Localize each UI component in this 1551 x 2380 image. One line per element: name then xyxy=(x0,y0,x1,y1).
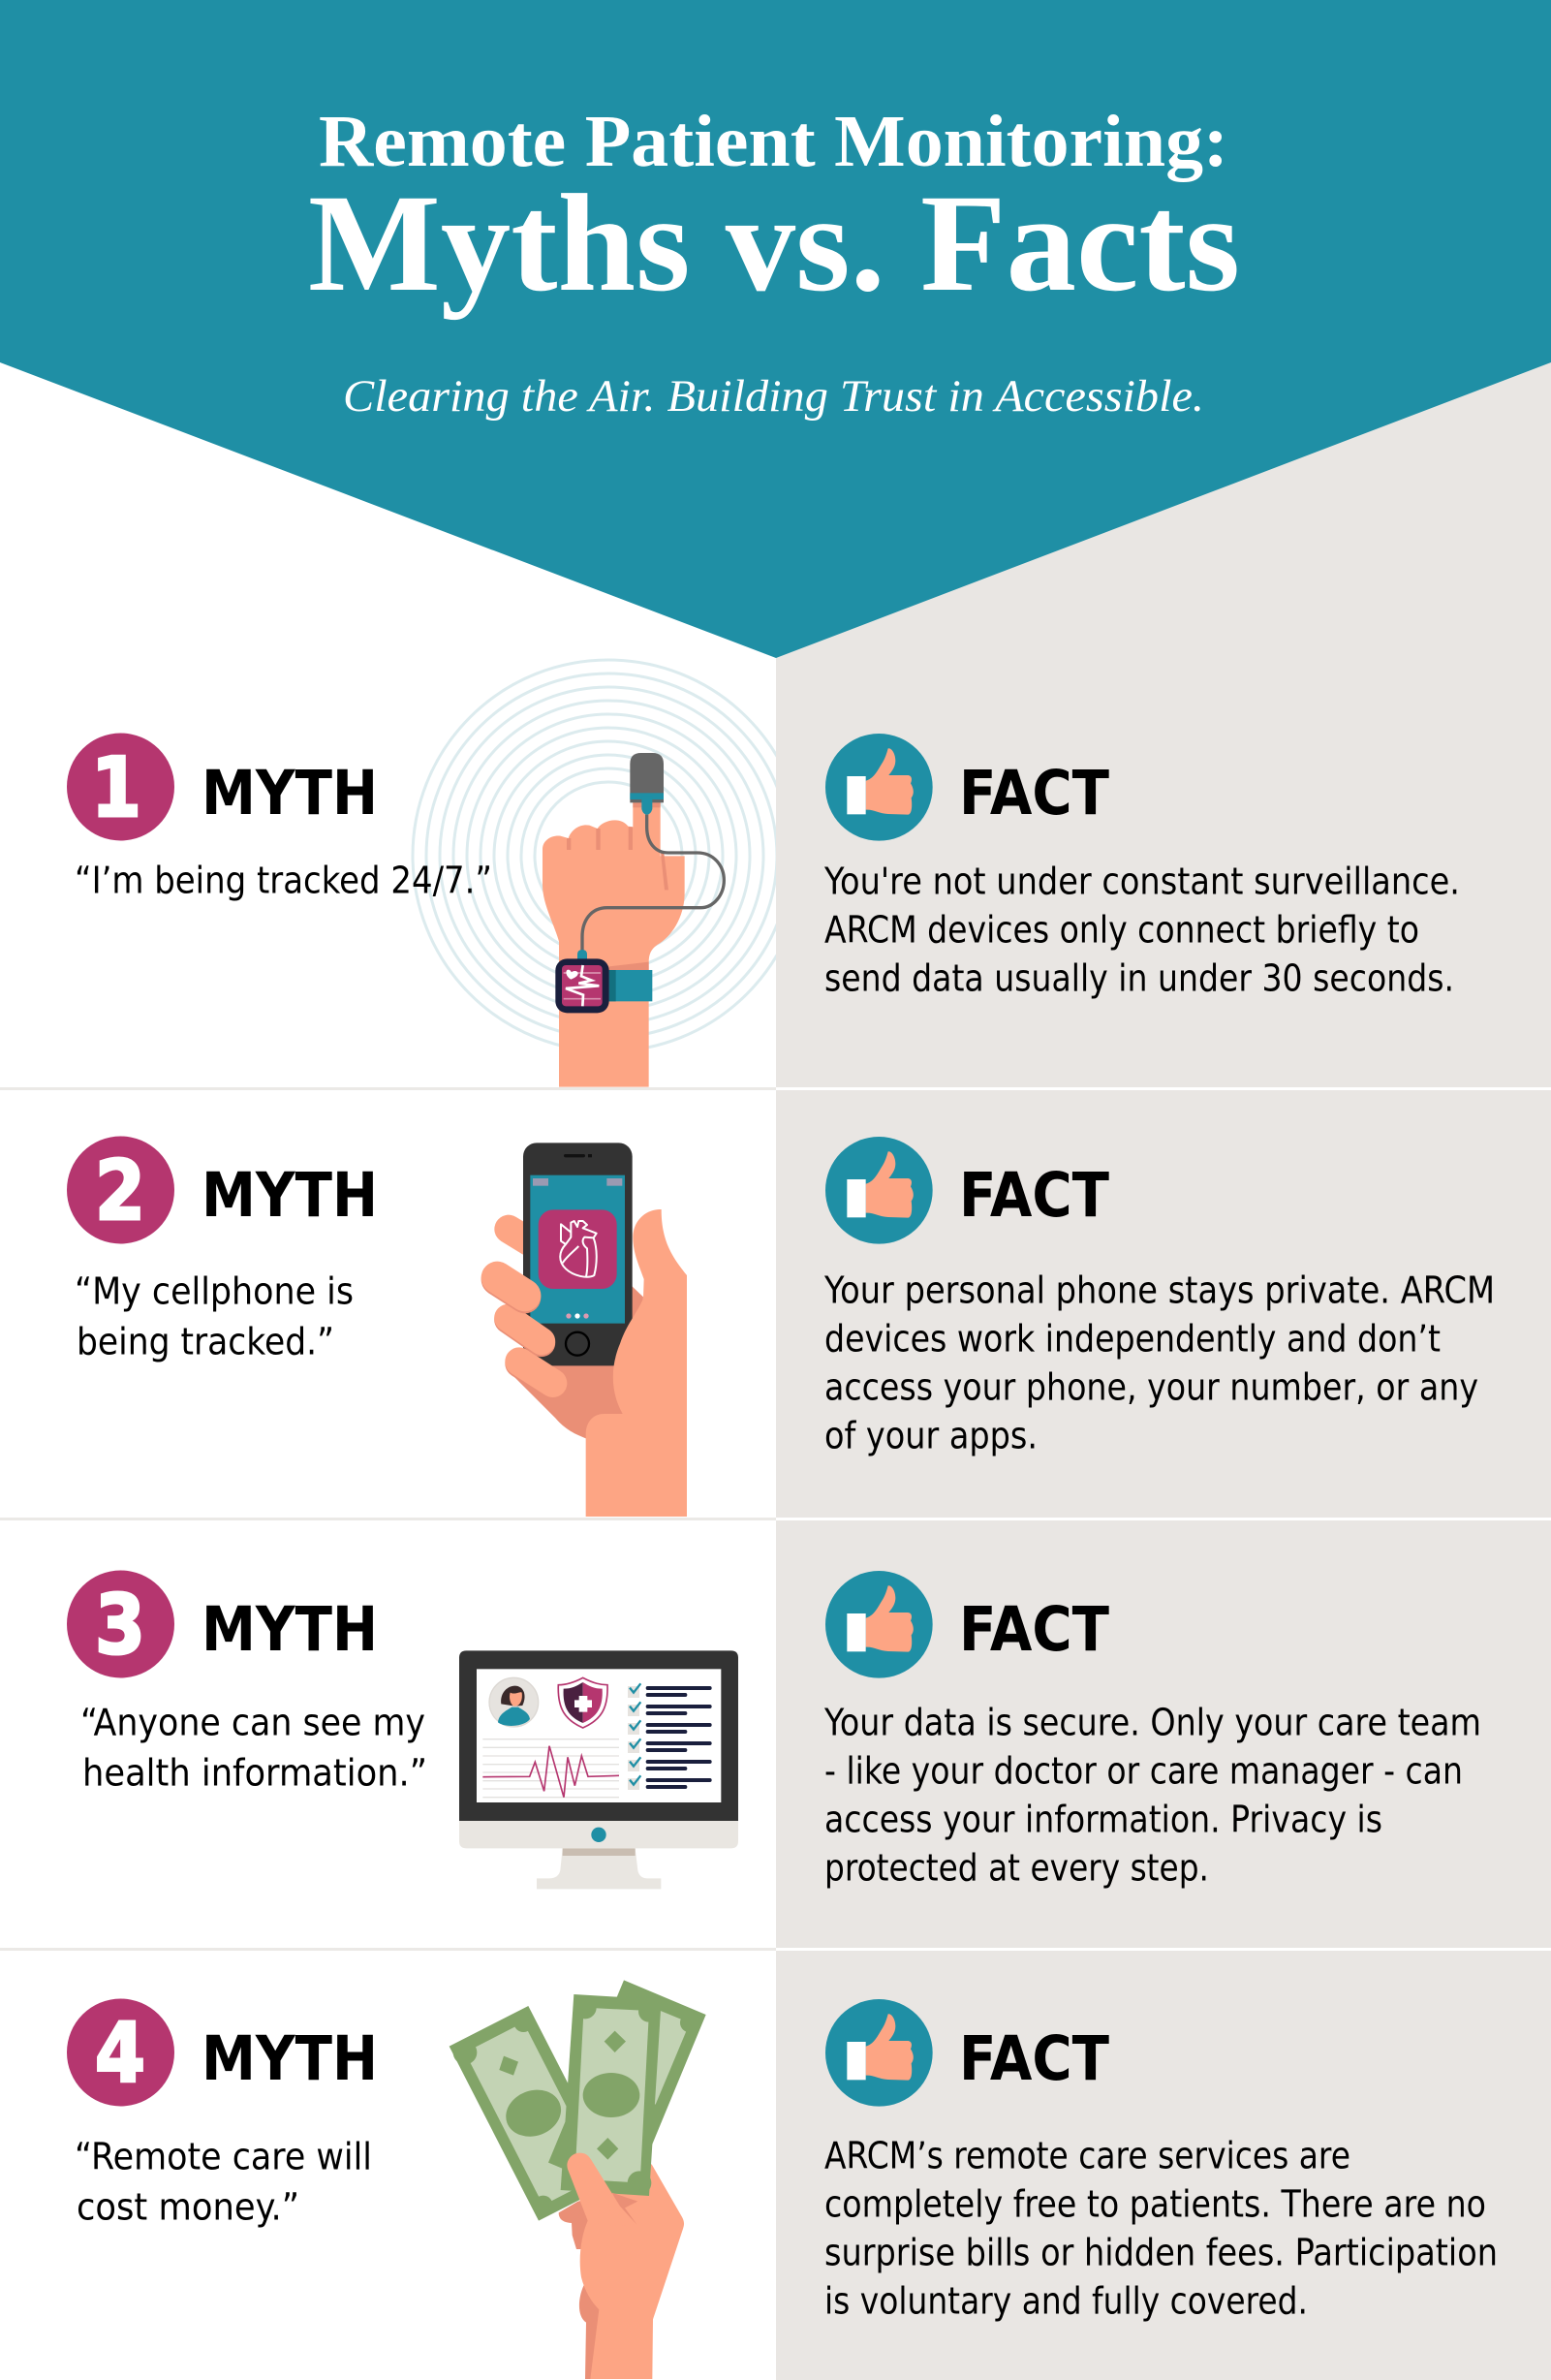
myth 1 heading: MYTH xyxy=(202,758,378,829)
fact 2 text: devices work independently and don’t xyxy=(824,1318,1441,1361)
myth 3 number badge xyxy=(67,1570,174,1678)
shield xyxy=(558,1677,607,1728)
header banner xyxy=(0,0,1551,658)
panel: fact 4 xyxy=(776,1951,1551,2380)
myth 4 quote: “Remote care will xyxy=(75,2136,372,2178)
fact 1 heading: FACT xyxy=(959,758,1109,829)
fact 3 text: access your information. Privacy is xyxy=(824,1799,1382,1841)
panel: myth 3 xyxy=(0,1520,776,1948)
checklist xyxy=(628,1683,710,1790)
fact 1 text xyxy=(823,861,1460,1000)
fact 4 thumbs-up icon xyxy=(825,1999,933,2107)
myth 3 heading: MYTH xyxy=(202,1594,378,1665)
fact 3 thumbs-up icon xyxy=(825,1571,933,1678)
title line one: Remote Patient Monitoring: xyxy=(319,101,1228,182)
fact 1 text: You're not under constant surveillance. xyxy=(823,861,1460,903)
panel: myth 2 xyxy=(0,1090,776,1518)
illustration: monitor with health record xyxy=(459,1650,738,1889)
myth 1 number badge xyxy=(67,733,174,841)
fact 1 text: send data usually in under 30 seconds. xyxy=(824,957,1454,1000)
fact 3 text: protected at every step. xyxy=(824,1847,1209,1890)
fact 2 text xyxy=(823,1269,1495,1457)
fact 1 text: ARCM devices only connect briefly to xyxy=(824,909,1419,952)
myth 1 quote: “I’m being tracked 24/7.” xyxy=(75,859,492,901)
fact 2 heading: FACT xyxy=(959,1160,1109,1231)
myth 1 number badge: 1 xyxy=(91,740,141,836)
subtitle: Clearing the Air. Building Trust in Accessible. xyxy=(343,371,1204,422)
illustration: hand holding cash xyxy=(450,1980,706,2379)
fact 3 text: - like your doctor or care manager - can xyxy=(824,1750,1463,1793)
fact 4 text: is voluntary and fully covered. xyxy=(824,2279,1308,2322)
fact 4 text xyxy=(824,2134,1498,2322)
panel: myth 4 xyxy=(0,1951,776,2380)
myth 4 number badge: 4 xyxy=(95,2006,145,2102)
myth 2 quote xyxy=(75,1269,354,1362)
myth 3 quote: health information.” xyxy=(82,1752,427,1795)
myth 4 quote xyxy=(75,2136,372,2229)
myth 2 quote: being tracked.” xyxy=(77,1320,334,1362)
fact 1 thumbs-up icon xyxy=(825,734,933,841)
myth 3 quote: “Anyone can see my xyxy=(80,1702,425,1744)
myth 2 quote: “My cellphone is xyxy=(75,1269,354,1312)
myth 2 heading: MYTH xyxy=(202,1160,378,1231)
fact 2 thumbs-up icon xyxy=(825,1137,933,1244)
fact 4 heading: FACT xyxy=(959,2023,1109,2094)
title line two: Myths vs. Facts xyxy=(308,167,1240,321)
myth 2 number badge: 2 xyxy=(95,1143,145,1239)
myth 4 number badge xyxy=(67,1998,174,2107)
myth 2 number badge xyxy=(67,1136,174,1244)
myth 3 quote xyxy=(80,1702,427,1795)
chart: ECG trace xyxy=(482,1739,619,1798)
fact 3 heading: FACT xyxy=(959,1594,1109,1665)
myth 3 number badge: 3 xyxy=(95,1578,145,1674)
fact 2 text: of your apps. xyxy=(824,1415,1038,1457)
illustration: concentric signal rings xyxy=(413,660,804,1051)
panel: myth 1 xyxy=(67,659,776,1087)
illustration: hand holding phone xyxy=(497,1143,687,1517)
avatar xyxy=(489,1677,539,1727)
illustration: hand with pulse oximeter and watch xyxy=(543,753,724,1087)
fact 3 text xyxy=(823,1702,1481,1890)
panel: fact 2 xyxy=(776,1090,1551,1518)
fact 2 text: access your phone, your number, or any xyxy=(824,1366,1478,1409)
myth 4 heading: MYTH xyxy=(202,2023,378,2094)
panel: fact 3 xyxy=(776,1520,1551,1948)
panel: fact 1 xyxy=(776,659,1551,1087)
myth 4 quote: cost money.” xyxy=(77,2186,299,2229)
fact 4 text: ARCM’s remote care services are xyxy=(824,2134,1350,2176)
